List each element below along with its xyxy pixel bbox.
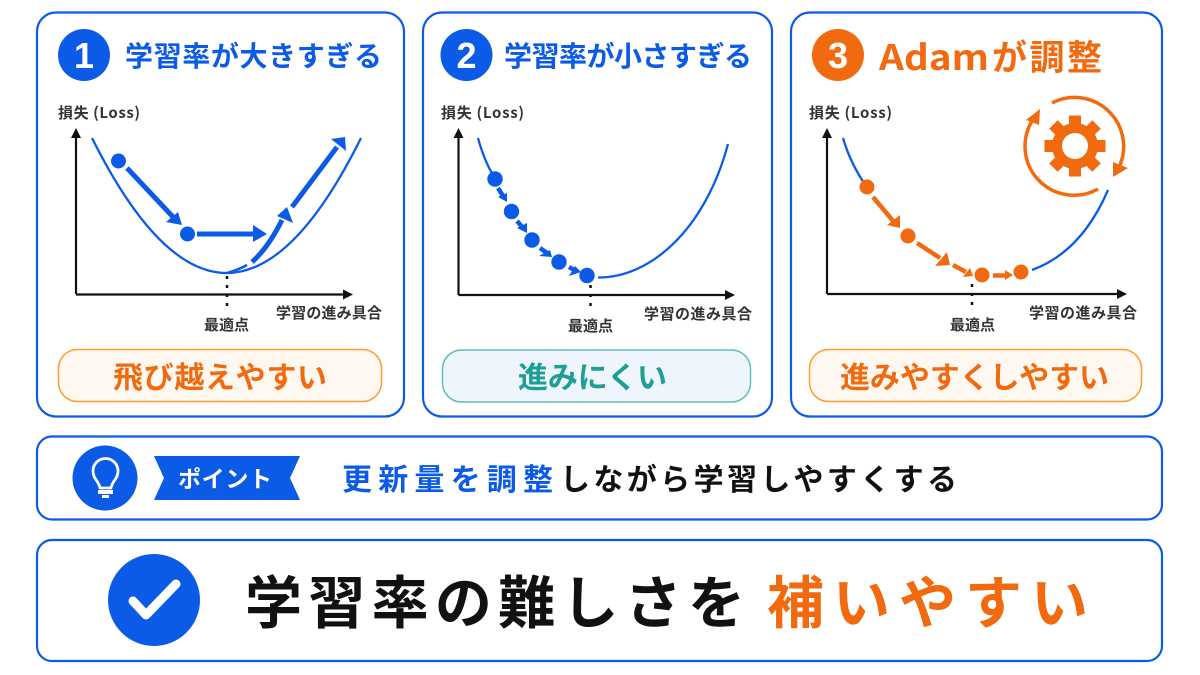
icon: gear with cycle arrows xyxy=(1025,97,1128,195)
panel: learning rate too large xyxy=(37,12,404,416)
step dots and arrows xyxy=(860,180,1028,282)
callout: overshoot: 飛び越えやすい xyxy=(113,353,327,397)
number badge 1 xyxy=(58,29,110,81)
number badge 3 xyxy=(812,29,864,81)
ribbon label xyxy=(154,456,300,500)
optimum dotted line xyxy=(226,276,228,310)
optimum dotted line xyxy=(589,285,592,311)
heading 3: が調整 xyxy=(992,30,1102,81)
panel: point bar xyxy=(37,436,1162,520)
panel: Adam adjusts xyxy=(791,12,1162,416)
heading 3: Adam xyxy=(878,30,989,81)
x axis label: 学習の進み具合 xyxy=(1029,302,1137,323)
optimum label: 最適点 xyxy=(568,315,613,336)
optimum label: 最適点 xyxy=(204,314,249,335)
callout: easier progress xyxy=(810,350,1142,402)
step dots and arrows xyxy=(487,171,595,283)
icon: light bulb xyxy=(72,446,138,510)
loss curve xyxy=(92,138,361,273)
conclusion text: 学習率の難しさを xyxy=(245,558,745,640)
callout: easier progress: 進みやすくしやすい xyxy=(840,353,1109,397)
step dots and arrows xyxy=(111,137,346,273)
callout: overshoot xyxy=(58,350,382,402)
number badge 1: 1 xyxy=(74,35,94,76)
loss curve xyxy=(843,138,1108,270)
axes xyxy=(454,128,735,300)
panel: conclusion bar xyxy=(37,540,1162,661)
x axis label: 学習の進み具合 xyxy=(644,303,752,324)
point text: しながら学習しやすくする xyxy=(560,455,957,499)
number badge 2 xyxy=(440,29,492,81)
y axis label: 損失 (Loss) xyxy=(441,102,524,123)
conclusion text xyxy=(245,558,1088,640)
icon: check mark xyxy=(108,554,200,646)
heading 3 xyxy=(878,30,1102,81)
number badge 3: 3 xyxy=(828,35,848,76)
panel: learning rate too small xyxy=(423,12,772,416)
heading 1: 学習率が大きすぎる xyxy=(125,35,382,75)
heading 2: 学習率が小さすぎる xyxy=(504,35,752,75)
x axis label: 学習の進み具合 xyxy=(276,302,382,323)
number badge 2: 2 xyxy=(456,35,477,76)
y axis label: 損失 (Loss) xyxy=(58,102,140,123)
y axis label: 損失 (Loss) xyxy=(809,102,892,123)
callout: slow progress: 進みにくい xyxy=(518,353,667,397)
point text: 更新量を調整 xyxy=(342,455,553,499)
loss curve xyxy=(478,138,728,278)
ribbon label: ポイント xyxy=(178,460,272,494)
optimum dotted line xyxy=(971,284,973,310)
axes xyxy=(822,128,1127,299)
callout: slow progress xyxy=(442,350,750,402)
conclusion text: 補いやすい xyxy=(767,558,1088,640)
axes xyxy=(71,128,353,300)
point text xyxy=(342,455,957,499)
optimum label: 最適点 xyxy=(950,314,995,335)
